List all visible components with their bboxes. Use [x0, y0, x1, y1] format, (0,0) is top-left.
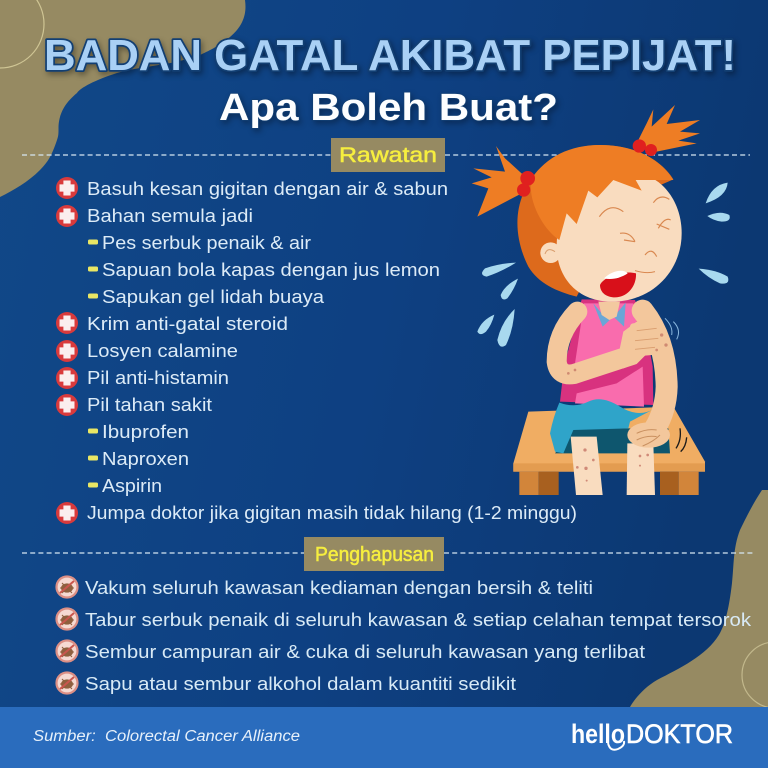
item: Bahan semula jadi: Bahan semula jadi — [87, 205, 253, 226]
title: Apa Boleh Buat? — [219, 87, 558, 129]
title — [44, 31, 736, 129]
scratch motion marks — [665, 318, 679, 339]
source: Sumber: Colorectal Cancer Alliance — [33, 728, 300, 745]
item: Sembur: Sembur campuran air & cuka di seluruh kawasan yang terlibat — [85, 641, 645, 662]
skirt — [550, 399, 655, 453]
item: Pil anti-histamin: Pil anti-histamin — [87, 367, 229, 388]
list: Rawatan items — [56, 177, 577, 524]
left arm and hand — [557, 312, 668, 375]
item: Losyen: Losyen calamine — [87, 340, 238, 361]
ear — [540, 242, 561, 263]
right arm — [627, 311, 670, 448]
list: Penghapusan items — [56, 576, 752, 694]
heading: Penghapusan — [304, 537, 444, 571]
item: Vakum: Vakum seluruh kawasan kediaman dengan bersih & teliti — [85, 577, 593, 598]
item: Jumpa doktor: Jumpa doktor jika gigitan masih tidak hilang (1-2 minggu) — [87, 502, 577, 523]
fringe — [531, 145, 673, 240]
footer bar — [0, 707, 768, 768]
stool — [513, 407, 705, 495]
hair — [517, 145, 673, 297]
ponytail left — [472, 146, 523, 217]
face — [557, 172, 682, 302]
item: Krim: Krim anti-gatal steroid — [87, 313, 288, 334]
eyes and nose — [599, 197, 671, 257]
decorative blob: top left — [0, 0, 245, 197]
illustration: itchy crying girl on stool — [472, 105, 730, 495]
heading: Rawatan: Rawatan — [339, 144, 437, 167]
logo: helloDOKTOR: DOKTOR — [626, 719, 733, 749]
tears — [477, 183, 730, 347]
item: Pil tahan sakit: Pil tahan sakit — [87, 394, 212, 415]
sub-item: Sapuan bola kapas: Sapuan bola kapas dengan jus lemon — [102, 259, 440, 280]
logo: helloDOKTOR: hello — [571, 719, 625, 749]
item: Basuh kesan: Basuh kesan gigitan dengan air & sabun — [87, 178, 448, 199]
legs — [571, 437, 655, 495]
sub-item: Sapukan gel: Sapukan gel lidah buaya — [102, 286, 325, 307]
item: Sapu: Sapu atau sembur alkohol dalam kuantiti sedikit — [85, 673, 516, 694]
sub-item: Aspirin: Aspirin — [102, 475, 162, 496]
logo: helloDOKTOR — [571, 719, 733, 750]
item: Tabur: Tabur serbuk penaik di seluruh kawasan & setiap celahan tempat tersorok — [85, 609, 752, 630]
mouth — [600, 271, 655, 297]
under skirt shadow — [555, 428, 670, 453]
title: BADAN GATAL AKIBAT PEPIJAT! — [44, 31, 736, 80]
heading: Rawatan — [331, 138, 445, 172]
heading: Penghapusan: Penghapusan — [315, 544, 434, 566]
decorative blob: bottom right — [630, 490, 768, 708]
sub-item: Pes serbuk: Pes serbuk penaik & air — [102, 232, 311, 253]
ponytail right — [637, 105, 700, 152]
sub-item: Ibuprofen: Ibuprofen — [102, 421, 189, 442]
hair ties — [517, 139, 657, 197]
dress — [560, 299, 653, 407]
sub-item: Naproxen: Naproxen — [102, 448, 189, 469]
